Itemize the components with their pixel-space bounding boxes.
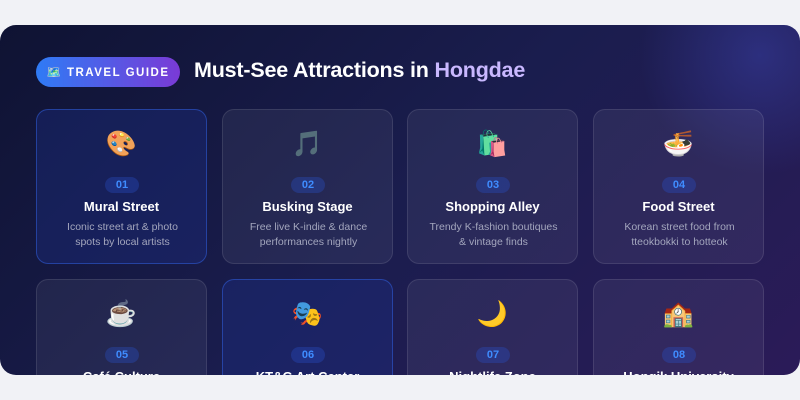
card 03: Trendy K-fashion boutiques & vintage finds — [429, 221, 558, 248]
card 01 — [36, 109, 207, 264]
card 06 — [222, 279, 393, 375]
card 02: 02 — [302, 179, 314, 191]
card 08 — [593, 279, 764, 375]
card 02: 🎵 — [292, 130, 323, 159]
card 03: 03 — [487, 179, 499, 191]
card 02 — [222, 109, 393, 264]
card 01: 01 — [116, 179, 128, 191]
card 05: 05 — [116, 349, 128, 361]
card 07: 🌙 — [477, 300, 508, 329]
card 04: 04 — [673, 179, 685, 191]
card 04: Korean street food from tteokbokki to hotteok — [624, 221, 735, 248]
card 06: 06 — [302, 349, 314, 361]
card 02: Busking Stage — [262, 199, 353, 214]
card 06: 🎭 — [292, 300, 323, 329]
card 05 — [36, 279, 207, 375]
card 01: Mural Street — [84, 199, 159, 214]
card 01: 🎨 — [106, 130, 137, 159]
card 07 — [407, 279, 578, 375]
card 08: 🏫 — [663, 300, 694, 329]
card 07: 07 — [487, 349, 499, 361]
card 04: 🍜 — [663, 130, 694, 159]
card 02: Free live K-indie & dance performances nightly — [250, 221, 367, 248]
title: Must-See Attractions in Hongdae — [194, 58, 525, 82]
card 03: 🛍️ — [477, 130, 508, 159]
badge: travel guide — [36, 57, 180, 87]
card 03 — [407, 109, 578, 264]
card 04 — [593, 109, 764, 264]
card 08: 08 — [673, 349, 685, 361]
card 03: Shopping Alley — [445, 199, 540, 214]
badge: travel guide: 🗺️ TRAVEL GUIDE — [46, 67, 170, 79]
card 05: ☕ — [106, 300, 137, 329]
card 01: Iconic street art & photo spots by local artists — [67, 221, 178, 248]
card 04: Food Street — [642, 199, 715, 214]
